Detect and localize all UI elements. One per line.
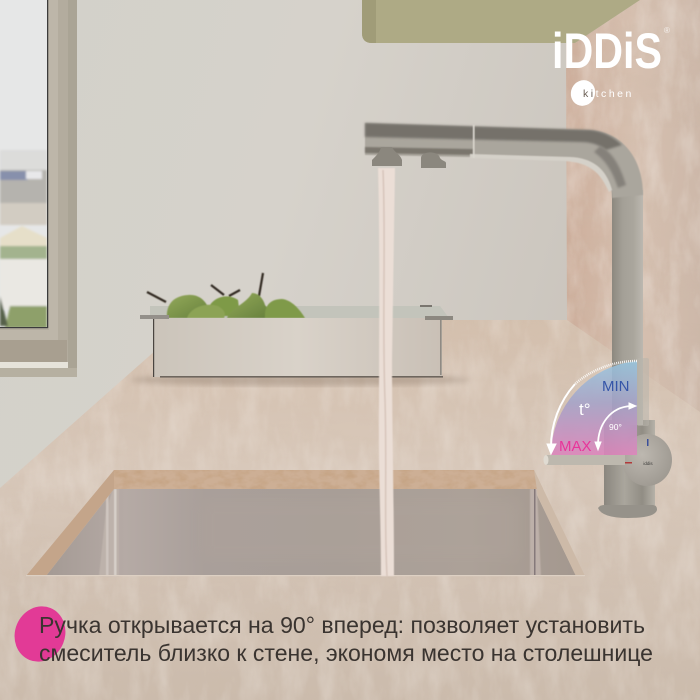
sink stone rim: [114, 470, 543, 489]
panel: tray with pears: [140, 273, 453, 378]
water stream: [378, 168, 395, 576]
registered mark: ®: [664, 26, 670, 35]
faucet lower body: [604, 420, 655, 505]
label 90°: 90°: [609, 422, 622, 432]
aerator outlets: [372, 147, 402, 166]
ghost lever vertical: [637, 358, 649, 426]
window frame: [0, 0, 77, 377]
panel: temperature rotation diagram: [544, 358, 649, 465]
lever horizontal: [544, 455, 625, 465]
basin corner seams: [99, 489, 119, 576]
panel: sink: [26, 468, 585, 576]
window glass with city view: [0, 0, 47, 328]
tray handles: [140, 315, 169, 319]
logo blob: [567, 76, 599, 110]
pink accent blob: [6, 599, 74, 669]
caption: [6, 599, 653, 669]
handle dial: [622, 434, 672, 486]
logo wordmark: iDDiS: [552, 23, 662, 79]
inner arc arrow: [595, 403, 636, 450]
tray back rim: [150, 306, 449, 318]
panel: window: [0, 0, 77, 377]
faucet spout: [365, 123, 643, 198]
sink metal basin: [46, 489, 576, 576]
caption text: Ручка открывается на 90° вперед: позволяет установить: [39, 612, 645, 638]
label MAX: MAX: [559, 438, 592, 455]
panel: countertop: [0, 320, 700, 700]
faucet vertical tube: [612, 190, 643, 425]
panel: travertine right wall: [560, 0, 700, 420]
logo kitchen word: kitchen: [583, 88, 633, 100]
wall cabinet: [362, 0, 640, 43]
faucet base plate: [598, 505, 657, 518]
tray front: [153, 318, 442, 377]
label t°: t°: [579, 400, 591, 419]
label MIN: MIN: [602, 378, 630, 395]
handle marks: iddis: [643, 461, 653, 466]
handle marks: [624, 439, 653, 466]
logo: iDDiS kitchen: [552, 23, 670, 110]
pears: [147, 273, 305, 318]
gradient fan sector: [551, 361, 637, 455]
outer arc arrow: [547, 361, 637, 454]
caption text: смеситель близко к стене, экономя место на столешнице: [39, 640, 653, 666]
panel: faucet: [365, 123, 672, 518]
